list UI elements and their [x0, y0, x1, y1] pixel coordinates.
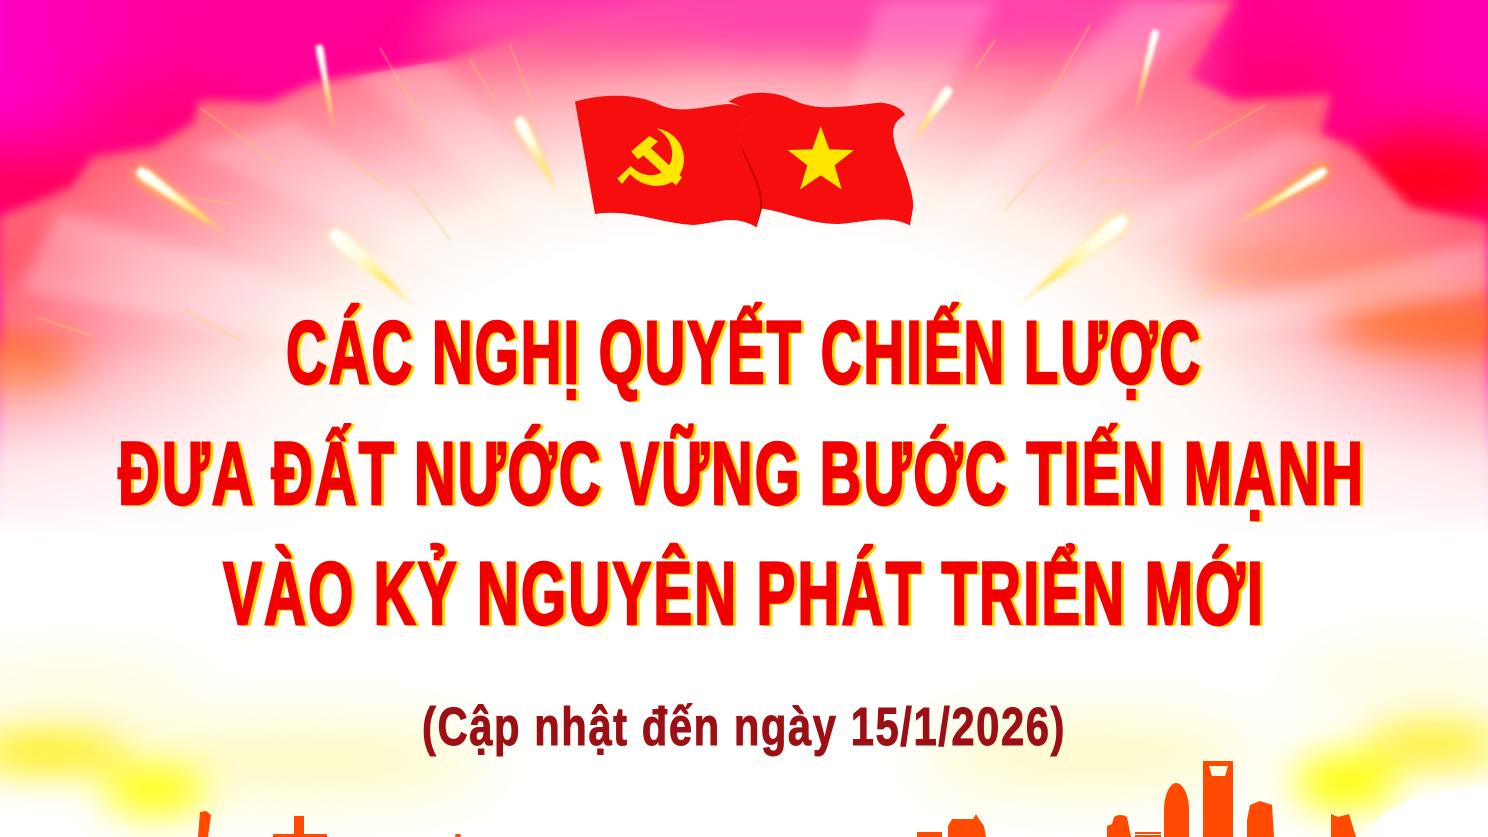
firework streaks — [40, 25, 1332, 340]
subtitle: update date: (Cập nhật đến ngày 15/1/2026) — [422, 697, 1066, 757]
clouds — [440, 787, 1487, 836]
yellow glows — [0, 664, 1488, 814]
flag: Communist Party — [575, 96, 760, 227]
city skyline — [198, 761, 1356, 837]
title — [118, 302, 1365, 643]
light rays — [18, 0, 1488, 328]
flags — [575, 93, 913, 227]
flag: Vietnam national — [728, 93, 913, 227]
